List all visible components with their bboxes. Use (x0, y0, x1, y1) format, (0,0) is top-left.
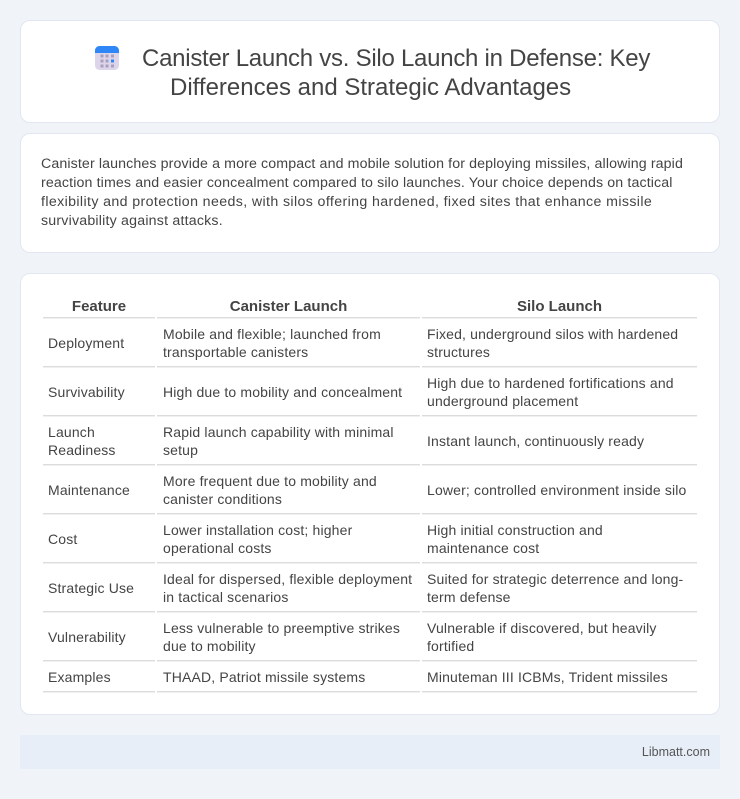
row: Cost: Lower installation cost; higher (163, 522, 352, 538)
row: Survivability: High due to mobility and concealment (163, 384, 402, 400)
row: Vulnerability: fortified (427, 638, 474, 654)
row: Examples: Examples (48, 669, 111, 685)
title: Differences and Strategic Advantages (170, 74, 571, 101)
icon: calendar (95, 46, 119, 70)
row: Survivability (48, 375, 674, 409)
row: Deployment (48, 326, 678, 360)
panel: introduction (20, 133, 720, 253)
row: Launch Readiness: Rapid launch capability with minimal (163, 424, 394, 440)
introduction text: flexibility and protection needs, with silos offering hardened, fixed sites that enhance missile (41, 194, 652, 210)
row: Launch Readiness: setup (163, 442, 198, 458)
table header: Feature: Feature (72, 298, 126, 315)
row: Examples (48, 669, 668, 685)
introduction text: survivability against attacks. (41, 213, 223, 229)
row: Examples: THAAD, Patriot missile systems (163, 669, 365, 685)
row: Deployment: structures (427, 344, 490, 360)
row: Launch Readiness: Readiness (48, 442, 116, 458)
row: Cost: maintenance cost (427, 540, 539, 556)
row: Strategic Use (48, 571, 683, 605)
row: Survivability: Survivability (48, 384, 125, 400)
row: Vulnerability: Less vulnerable to preemptive strikes (163, 620, 400, 636)
row: Launch Readiness (48, 424, 644, 458)
row: Vulnerability: due to mobility (163, 638, 256, 654)
row: Deployment: Mobile and flexible; launched from (163, 326, 381, 342)
title: Canister Launch vs. Silo Launch in Defense: Key (142, 45, 650, 72)
row: Maintenance (48, 473, 686, 507)
row: Cost (48, 522, 603, 556)
table header: Canister Launch: Canister Launch (230, 298, 347, 315)
introduction text: Canister launches provide a more compact and mobile solution for deploying missiles, allowing rapid (41, 156, 683, 172)
row: Cost: operational costs (163, 540, 272, 556)
row: Strategic Use: Strategic Use (48, 580, 134, 596)
row: Survivability: High due to hardened fortifications and (427, 375, 674, 391)
row: Strategic Use: Suited for strategic deterrence and long- (427, 571, 683, 587)
row: Maintenance: canister conditions (163, 491, 282, 507)
row: Deployment: Deployment (48, 335, 124, 351)
row: Survivability: underground placement (427, 393, 578, 409)
row: Strategic Use: Ideal for dispersed, flexible deployment (163, 571, 412, 587)
panel: title card (20, 20, 720, 123)
row: Strategic Use: term defense (427, 589, 511, 605)
row: Vulnerability (48, 620, 657, 654)
row: Launch Readiness: Launch (48, 424, 95, 440)
row: Maintenance: Lower; controlled environment inside silo (427, 482, 686, 498)
title (142, 45, 650, 101)
panel: comparison table (20, 273, 720, 715)
row: Cost: High initial construction and (427, 522, 603, 538)
row: Strategic Use: in tactical scenarios (163, 589, 289, 605)
row: Maintenance: Maintenance (48, 482, 130, 498)
footer bar (20, 735, 720, 769)
table header: Silo Launch: Silo Launch (517, 298, 602, 315)
row: Cost: Cost (48, 531, 77, 547)
row: Deployment: Fixed, underground silos with hardened (427, 326, 678, 342)
row: Launch Readiness: Instant launch, continuously ready (427, 433, 644, 449)
footer credit: Libmatt.com (642, 745, 710, 759)
row: Examples: Minuteman III ICBMs, Trident missiles (427, 669, 668, 685)
row: Deployment: transportable canisters (163, 344, 308, 360)
row: Vulnerability: Vulnerability (48, 629, 126, 645)
row: Vulnerability: Vulnerable if discovered, but heavily (427, 620, 657, 636)
table dividers (43, 317, 697, 693)
introduction text (41, 156, 683, 229)
introduction text: reaction times and easier concealment compared to silo launches. Your choice depends on tactical (41, 175, 673, 191)
row: Maintenance: More frequent due to mobility and (163, 473, 377, 489)
